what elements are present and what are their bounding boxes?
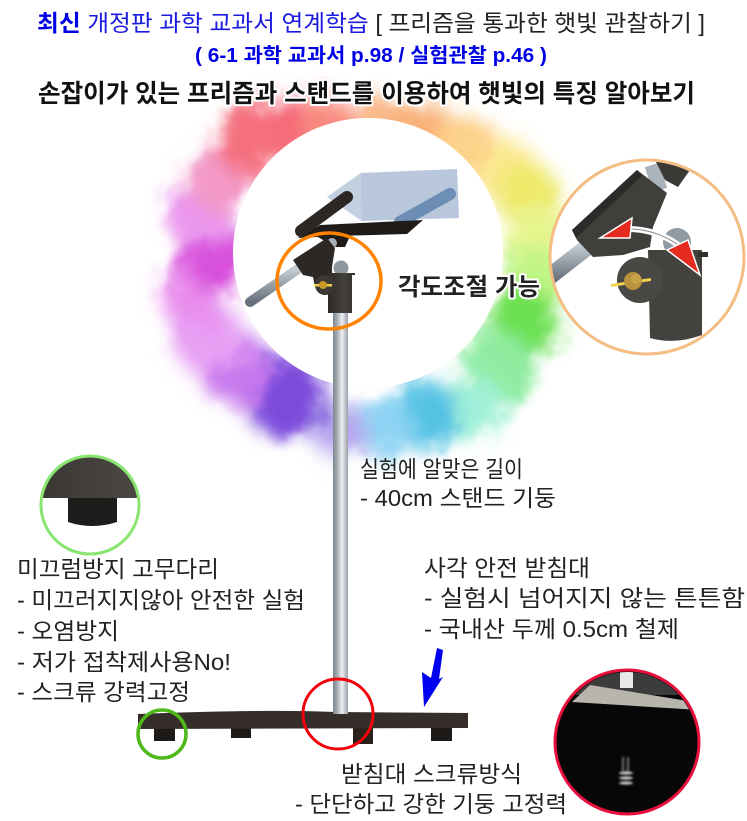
rubber foot text: - 저가 접착제사용No!	[17, 649, 231, 675]
rubber foot text: - 스크류 강력고정	[17, 679, 190, 705]
detail circle: angle joint	[545, 160, 744, 354]
gold bolt	[314, 284, 332, 286]
bracket detail	[572, 170, 667, 257]
prism	[327, 169, 459, 221]
red highlight circle	[303, 679, 373, 749]
detail circle: screw underside	[555, 665, 700, 814]
textbook reference: ( 6-1 과학 교과서 p.98 / 실험관찰 p.46 )	[195, 44, 547, 67]
body detail	[648, 250, 702, 341]
red double arrow	[600, 218, 700, 275]
square base	[138, 690, 468, 744]
screw text	[295, 761, 567, 817]
rubber foot text: - 미끄러지지않아 안전한 실험	[17, 587, 305, 613]
rainbow watercolor ring	[161, 94, 570, 458]
orange highlight circle	[277, 233, 381, 329]
pole length text: - 40cm 스탠드 기둥	[360, 485, 556, 511]
pole	[333, 312, 348, 714]
safety base text: 사각 안전 받침대	[424, 555, 590, 581]
bolt detail	[611, 278, 651, 287]
lower gray rod	[250, 269, 298, 302]
safety base text: - 실험시 넘어지지 않는 튼튼함	[424, 585, 745, 611]
rubber foot text	[17, 556, 305, 705]
rod detail	[545, 245, 590, 280]
detail circle: rubber foot	[38, 455, 142, 554]
title line: 최신 개정판 과학 교과서 연계학습 [ 프리즘을 통과한 햇빛 관찰하기 ]	[37, 10, 705, 36]
rod through prism	[400, 194, 450, 222]
green highlight circle	[138, 710, 186, 758]
subtitle: 손잡이가 있는 프리즘과 스탠드를 이용하여 햇빛의 특징 알아보기	[38, 80, 695, 108]
pole length text: 실험에 알맞은 길이	[360, 456, 523, 482]
ball joint	[334, 260, 348, 276]
screw text: 받침대 스크류방식	[341, 761, 522, 787]
prism handle	[301, 197, 347, 231]
ball detail	[663, 228, 691, 250]
safety base text: - 국내산 두께 0.5cm 철제	[424, 616, 679, 642]
rubber foot text: - 오염방지	[17, 618, 119, 644]
safety base text	[424, 555, 745, 642]
prism stand	[250, 169, 459, 714]
pole length text	[360, 456, 556, 511]
rubber foot text: 미끄럼방지 고무다리	[17, 556, 219, 582]
screw text: - 단단하고 강한 기둥 고정력	[295, 791, 567, 817]
joint body	[328, 273, 355, 313]
bracket	[293, 238, 335, 295]
blue arrow	[422, 648, 443, 707]
angle adjustment label: 각도조절 가능	[398, 274, 540, 301]
prism plate	[298, 220, 423, 247]
